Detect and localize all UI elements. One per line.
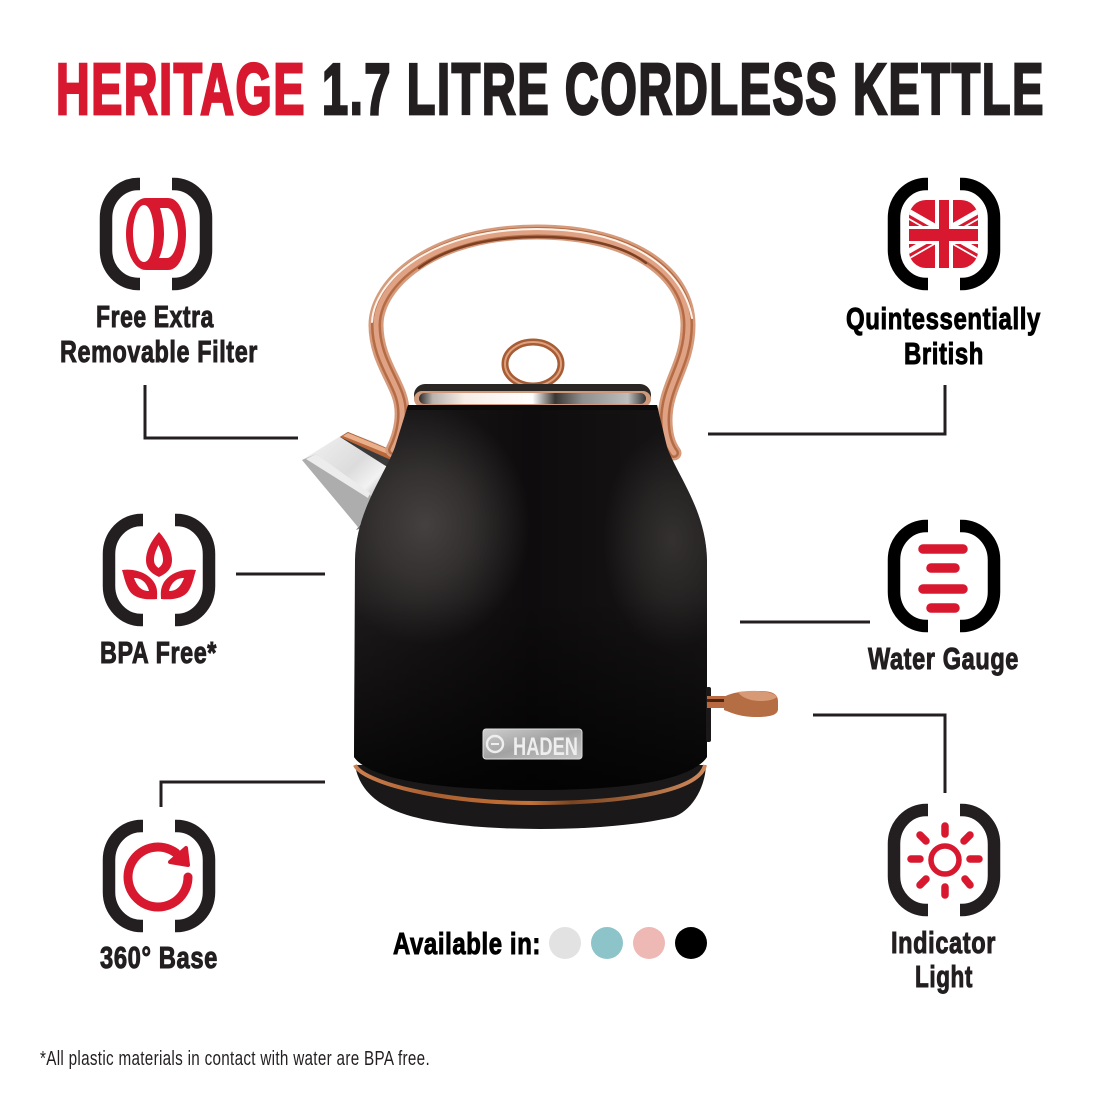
label: indicator light (891, 925, 996, 994)
panel: indicator light (813, 715, 996, 994)
icon: filter (106, 184, 206, 284)
label: 360 base: 360° Base (100, 940, 218, 975)
label: free extra removable filter (60, 299, 258, 369)
kettle handle (372, 229, 692, 453)
label: quintessentially british: British (904, 336, 984, 371)
title (56, 50, 1045, 130)
panel: water gauge (740, 526, 1019, 676)
footnote: *All plastic materials in contact with water are BPA free. (40, 1048, 430, 1070)
label: quintessentially british: Quintessentially (846, 301, 1041, 336)
swatch: teal (591, 927, 623, 959)
label: bpa free: BPA Free* (100, 635, 217, 670)
kettle lid knob (505, 342, 561, 386)
Haden badge: HADEN (513, 733, 578, 761)
kettle base with copper ring (355, 765, 706, 829)
kettle lid (414, 384, 651, 407)
title: HERITAGE (56, 50, 306, 130)
label: water gauge: Water Gauge (868, 641, 1019, 676)
swatch: black (675, 927, 707, 959)
kettle spout (302, 432, 402, 530)
panel: free extra removable filter (60, 184, 298, 438)
swatch: pink (633, 927, 665, 959)
label: free extra removable filter: Free Extra (96, 299, 214, 334)
label: indicator light: Light (915, 959, 973, 994)
icon: rotation arrow (109, 826, 209, 926)
swatch: light grey (549, 927, 581, 959)
switch / indicator knob (706, 687, 778, 742)
label: free extra removable filter: Removable Filter (60, 334, 258, 369)
kettle body (353, 405, 707, 805)
panel: quintessentially british (708, 184, 1041, 434)
available colours (393, 926, 707, 961)
kettle product image (302, 229, 778, 829)
label: quintessentially british (846, 301, 1041, 371)
icon: union jack (894, 184, 994, 284)
Haden badge (483, 729, 582, 761)
icon: sun (894, 810, 994, 910)
label: indicator light: Indicator (891, 925, 996, 960)
icon: water gauge bars (894, 526, 994, 626)
icon: leaves (109, 520, 209, 620)
label: available in: Available in: (393, 926, 541, 961)
panel: 360 base (100, 782, 325, 975)
panel: bpa free (100, 520, 325, 670)
copper ring (355, 765, 705, 803)
